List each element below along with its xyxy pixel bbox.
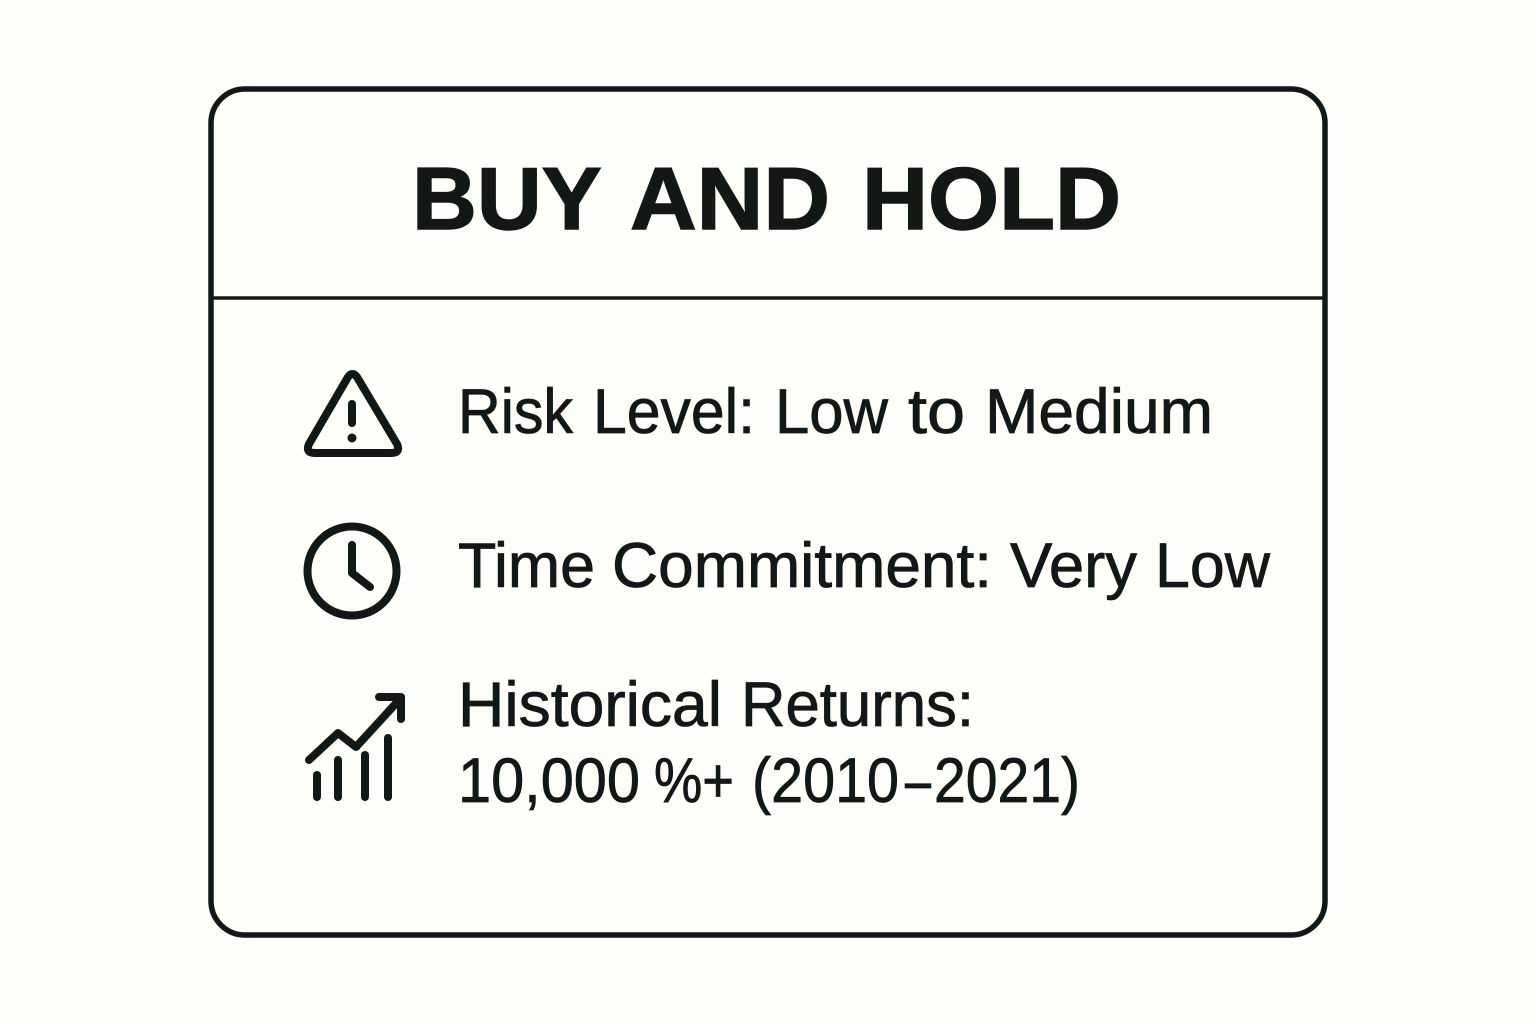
- text: risk level: Level:: [593, 377, 755, 447]
- title: HOLD: [862, 149, 1121, 248]
- text: time commitment: Time: [458, 531, 595, 601]
- text: time commitment: Very: [1010, 531, 1138, 601]
- text: historical returns: –: [905, 746, 931, 816]
- text: risk level: Medium: [985, 377, 1213, 447]
- icon: warning triangle: [308, 374, 398, 453]
- text: historical returns: (2010: [752, 746, 899, 816]
- text: historical returns: 10,000: [458, 746, 640, 816]
- text: risk level: Low: [775, 377, 888, 447]
- text: historical returns: [458, 670, 1080, 816]
- icon: growth chart: [309, 697, 401, 797]
- text: historical returns: Historical: [458, 670, 722, 740]
- icon: clock: [308, 526, 396, 616]
- panel: buy and hold card: [211, 89, 1325, 935]
- text: time commitment: Commitment:: [612, 531, 992, 601]
- title: BUY: [412, 149, 601, 248]
- text: time commitment: Low: [1155, 531, 1270, 601]
- title: AND: [630, 149, 830, 248]
- text: historical returns: %+: [654, 746, 734, 816]
- text: historical returns: 2021): [934, 746, 1080, 816]
- text: risk level: Risk: [458, 377, 573, 447]
- text: historical returns: Returns:: [741, 670, 974, 740]
- text: risk level: to: [908, 377, 965, 447]
